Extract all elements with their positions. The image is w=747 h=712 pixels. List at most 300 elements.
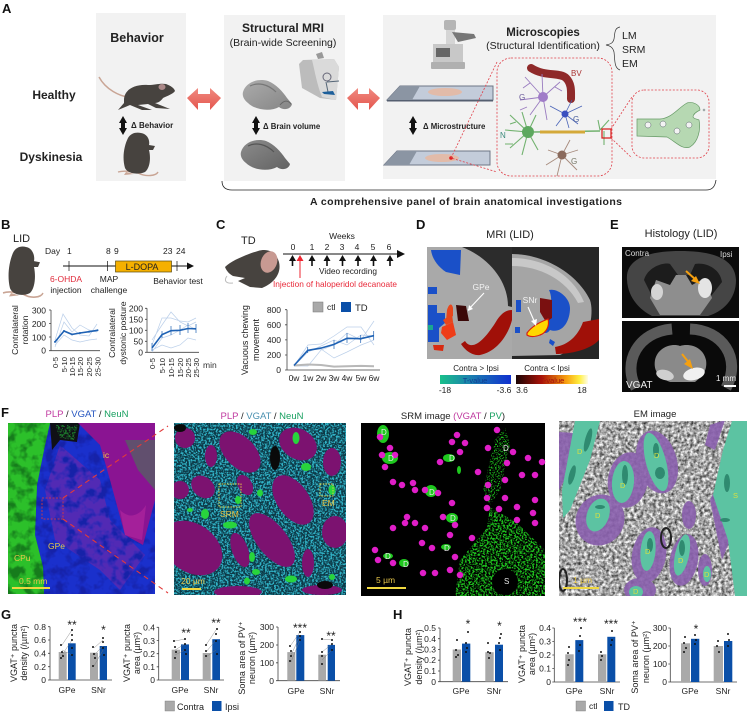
labels: dendrites: D xyxy=(654,451,660,460)
chart: VGAT puncta density: SNr xyxy=(91,685,106,695)
day labels: Day xyxy=(45,246,61,256)
row label: healthy: Healthy xyxy=(32,88,76,102)
image: EM xyxy=(559,420,747,602)
chart: contralateral rotation: 0 xyxy=(41,346,46,356)
chart: VGAT puncta area xyxy=(122,616,224,695)
chart: soma area of PV neuron: Soma area of PV⁺ xyxy=(237,621,247,695)
week numbers: 6 xyxy=(387,242,392,252)
chart: VGAT puncta density: * xyxy=(497,619,502,633)
chart: soma area of PV neuron: GPe xyxy=(681,686,699,696)
labels: dendrites: D xyxy=(633,587,639,596)
chart: contralateral rotation: 25-30 xyxy=(94,357,102,376)
image: GPe confocal xyxy=(174,423,346,595)
chart: contralateral rotation xyxy=(10,305,102,376)
label: injection: Injection of haloperidol decanoate xyxy=(273,279,397,289)
events xyxy=(50,274,203,295)
axis unit: min: min xyxy=(203,360,217,370)
heading: Histology (LID) xyxy=(645,228,717,240)
label and arrow: SNr: SNr xyxy=(523,295,537,305)
chart: vacuous chewing movement: 1w xyxy=(303,373,314,383)
chart: VGAT puncta area: *** xyxy=(604,617,618,631)
panel D: MRI xyxy=(416,217,599,395)
chart: VGAT puncta density: 0.4 xyxy=(34,648,46,658)
chart: contralateral rotation: 20-25 xyxy=(85,357,94,376)
legend: Contra xyxy=(177,702,204,712)
chart: contralateral dystonic posture: 25-30 xyxy=(192,358,201,377)
label: video recording: Video recording xyxy=(319,266,377,276)
labels: dendrites: D xyxy=(620,481,626,490)
labels: dendrites xyxy=(381,428,509,586)
chart: soma area of PV neuron: neuron (µm²) xyxy=(641,631,651,683)
panel: behavior xyxy=(96,13,186,181)
chart: soma area of PV neuron: 300 xyxy=(260,622,274,632)
chart: contralateral rotation: 300 xyxy=(32,306,46,316)
heading: LID: LID xyxy=(13,233,30,245)
labels: dendrites: D xyxy=(450,514,456,523)
highlighted synapse box xyxy=(602,129,611,138)
labels: cell types: N xyxy=(500,131,506,140)
day labels: 23 xyxy=(163,246,173,256)
heading: behavior: Behavior xyxy=(110,31,164,45)
chart: VGAT puncta area: 0.4 xyxy=(143,622,155,632)
chart: soma area of PV neuron: ** xyxy=(326,629,336,643)
labels: SRM EM xyxy=(181,498,335,586)
panel label E: E xyxy=(610,217,619,232)
legend: T-value colorbars: Contra < Ipsi xyxy=(524,364,570,373)
events: MAP xyxy=(100,274,119,284)
chart: VGAT puncta density: ** xyxy=(67,618,77,632)
image: SRM xyxy=(361,423,545,596)
legend xyxy=(165,701,239,712)
timeline xyxy=(273,231,405,289)
labels: contra and ipsi: Contra xyxy=(625,249,650,258)
legend: Ipsi xyxy=(225,702,239,712)
week numbers: 1 xyxy=(310,242,315,252)
chart: VGAT puncta area: *** xyxy=(573,615,587,629)
labels: dendrites: D xyxy=(503,444,509,453)
chart: contralateral dystonic posture: 0 xyxy=(138,348,143,358)
week numbers: 0 xyxy=(291,242,296,252)
chart: contralateral dystonic posture: 20-25 xyxy=(184,358,193,377)
chart: VGAT puncta density: 0.5 xyxy=(424,623,436,633)
legend: ctl xyxy=(327,302,336,312)
chart: soma area of PV neuron: 100 xyxy=(260,658,274,668)
labels: dendrites: S xyxy=(504,577,509,586)
chart: soma area of PV neuron: GPe xyxy=(287,686,305,696)
chart: VGAT puncta density: VGAT⁺ puncta xyxy=(9,624,19,682)
labels: dendrites: D xyxy=(388,454,394,463)
label: BV: BV xyxy=(571,69,582,78)
chart: VGAT puncta area: 0 xyxy=(546,677,551,687)
panel E: histology xyxy=(610,217,739,392)
labels: dendrites: D xyxy=(429,488,435,497)
chart: VGAT puncta area: area (µm²) xyxy=(132,632,142,674)
chart: VGAT puncta density: SNr xyxy=(487,686,501,696)
chart: contralateral dystonic posture: 150 xyxy=(129,314,143,324)
labels: dendrites: D xyxy=(595,511,601,520)
chart: soma area of PV neuron: 200 xyxy=(653,641,667,651)
heading: low magnification channels: PLP / VGAT / NeuN xyxy=(46,409,129,420)
callout: cell types xyxy=(497,58,612,176)
legend: T-value colorbars: Contra > Ipsi xyxy=(453,364,499,373)
chart: vacuous chewing movement: movement xyxy=(251,318,261,361)
legend: TD xyxy=(355,303,368,314)
labels: contra and ipsi: Ipsi xyxy=(720,250,733,259)
legend xyxy=(576,701,630,712)
labels: cell types: G xyxy=(573,115,579,124)
chart: VGAT puncta density: GPe xyxy=(58,685,76,695)
chart: contralateral rotation: 200 xyxy=(32,319,46,329)
chart: contralateral dystonic posture: 5-10 xyxy=(158,358,167,373)
label: VGAT: VGAT xyxy=(626,380,652,391)
callout: synaptic bouton xyxy=(632,90,709,158)
caption: comprehensive panel: A comprehensive panel of brain anatomical investigations xyxy=(310,196,622,208)
icon: microscope xyxy=(431,20,476,69)
chart: VGAT puncta area: 0.2 xyxy=(143,649,155,659)
glia: purple xyxy=(520,74,562,120)
icon: mouse head xyxy=(225,249,280,288)
label: weeks: Weeks xyxy=(329,231,355,241)
labels: SRM EM: EM xyxy=(322,498,335,508)
row label: dyskinesia: Dyskinesia xyxy=(20,150,83,164)
chart: VGAT puncta density: density (/µm²) xyxy=(19,625,29,681)
labels: ic GPe CPu: CPu xyxy=(14,553,31,563)
labels: dendrites: D xyxy=(704,570,710,579)
glia: blue xyxy=(550,100,582,128)
chart: VGAT puncta density: 0.3 xyxy=(424,644,436,654)
chart: VGAT puncta density: 0.1 xyxy=(424,666,436,676)
chart: vacuous chewing movement: 400 xyxy=(267,335,281,345)
day labels: 24 xyxy=(176,246,186,256)
chart: VGAT puncta density: VGAT⁺ puncta xyxy=(403,628,413,686)
chart: VGAT puncta area: ** xyxy=(211,616,221,630)
list: LM SRM EM: EM xyxy=(622,58,638,70)
events: challenge xyxy=(91,285,127,295)
chart: soma area of PV neuron: neuron (µm²) xyxy=(247,632,257,684)
chart: vacuous chewing movement: 2w xyxy=(316,373,327,383)
chart: VGAT puncta density: * xyxy=(101,623,106,637)
scale bar xyxy=(724,385,736,387)
chart: contralateral dystonic posture: Contralateral xyxy=(107,308,117,358)
callout lines: synapse zoom xyxy=(611,97,632,158)
chart: soma area of PV neuron: Soma area of PV⁺ xyxy=(630,620,640,694)
chart: soma area of PV neuron: SNr xyxy=(320,686,334,696)
labels: ic GPe CPu: GPe xyxy=(48,541,65,551)
timeline xyxy=(45,246,203,295)
chart: VGAT puncta area: 0.1 xyxy=(143,662,155,672)
labels: dendrites: D xyxy=(385,552,391,561)
panel H: TD quantification xyxy=(393,607,737,712)
heading: SRM image: SRM image (VGAT / PV) xyxy=(401,411,505,422)
labels: dendrites: D xyxy=(577,447,583,456)
blood vessel xyxy=(531,68,571,99)
chart: VGAT puncta density: 0.6 xyxy=(34,635,46,645)
label: delta behavior: Δ Behavior xyxy=(131,121,173,130)
label: L-DOPA: L-DOPA xyxy=(126,262,158,272)
chart: contralateral rotation: rotation xyxy=(20,315,30,344)
chart: VGAT puncta area: ** xyxy=(181,626,191,640)
icon: dyskinesia slide xyxy=(384,151,490,165)
chart: VGAT puncta area: 0.3 xyxy=(539,636,551,646)
label: scale bar: 5 µm xyxy=(376,575,395,585)
chart: VGAT puncta area: SNr xyxy=(600,686,614,696)
chart: contralateral dystonic posture: 0-5 xyxy=(148,358,157,369)
ROI boxes xyxy=(219,484,333,507)
bracket: comprehensive panel xyxy=(222,180,716,190)
red arrow: injection xyxy=(296,255,304,278)
panel: microscopies xyxy=(383,15,716,179)
subheading: structural identification: (Structural Identification) xyxy=(486,40,600,52)
chart: contralateral dystonic posture: 10-15 xyxy=(167,358,176,377)
scale bar xyxy=(182,588,201,590)
chart: soma area of PV neuron: 100 xyxy=(653,659,667,669)
heading: structural MRI: Structural MRI xyxy=(242,21,324,35)
week numbers: 2 xyxy=(325,242,330,252)
scale bar xyxy=(12,587,50,589)
events: Behavior test xyxy=(153,276,203,286)
chart: vacuous chewing movement: 6w xyxy=(369,373,380,383)
bracket: microscopy types xyxy=(606,27,620,70)
panel label B: B xyxy=(1,217,10,232)
zoom box xyxy=(42,498,63,519)
chart: contralateral rotation: 5-10 xyxy=(60,357,69,372)
chart: contralateral dystonic posture: 100 xyxy=(129,326,143,336)
chart: VGAT puncta area: 0.2 xyxy=(539,650,551,660)
list: LM SRM EM: SRM xyxy=(622,44,645,56)
labels: dendrites: D xyxy=(645,547,651,556)
histology image: top xyxy=(622,247,739,318)
chart: VGAT puncta density: 0.2 xyxy=(424,655,436,665)
L-DOPA bar xyxy=(116,261,172,272)
chart: contralateral dystonic posture: 15-20 xyxy=(176,358,185,377)
bouton shape xyxy=(637,102,700,148)
chart: VGAT puncta area: SNr xyxy=(204,685,218,695)
panel label A: A xyxy=(2,1,12,16)
chart: VGAT puncta area: 0 xyxy=(150,675,155,685)
chart: VGAT puncta density: 0.4 xyxy=(424,634,436,644)
scale bar xyxy=(563,587,599,589)
week numbers: 5 xyxy=(371,242,376,252)
panel label D: D xyxy=(416,217,425,232)
labels: cell types: G xyxy=(519,93,525,102)
labels: SRM EM: 20 µm xyxy=(181,576,205,586)
panel label C: C xyxy=(216,217,226,232)
legend: T-value colorbars: -3.6 xyxy=(497,385,512,395)
legend: T-value colorbars: T-value xyxy=(540,376,564,385)
chart: VGAT puncta area: VGAT⁺ puncta xyxy=(517,625,527,683)
labels: ic GPe CPu: 0.5 mm xyxy=(19,576,47,586)
chart: vacuous chewing movement: 600 xyxy=(267,320,281,330)
chart: contralateral rotation: 0-5 xyxy=(51,357,60,368)
arrow: delta microstructure xyxy=(409,116,417,135)
chart: VGAT puncta density: * xyxy=(466,617,471,631)
chart: VGAT puncta area: 0.1 xyxy=(539,664,551,674)
labels: ic GPe CPu: ic xyxy=(103,450,110,460)
heading: EM image: EM image xyxy=(634,409,676,420)
list: LM SRM EM xyxy=(622,30,645,70)
labels: dendrites: D xyxy=(678,556,684,565)
labels: cell types: G xyxy=(571,157,577,166)
icon: healthy brain xyxy=(243,80,292,110)
chart: soma area of PV neuron: 300 xyxy=(653,623,667,633)
panel label G: G xyxy=(1,607,11,622)
chart: VGAT puncta density: GPe xyxy=(452,686,470,696)
chart: VGAT puncta area xyxy=(517,615,620,696)
labels: dendrites: D xyxy=(444,544,450,553)
icon: dyskinesia brain xyxy=(241,140,290,170)
chart: VGAT puncta area: 0.3 xyxy=(143,636,155,646)
glia: brown xyxy=(546,140,578,176)
label: scale bar: 1 mm xyxy=(716,374,736,383)
panel G: LID quantification xyxy=(1,607,340,712)
histology image: VGAT xyxy=(622,321,739,392)
chart: vacuous chewing movement: 5w xyxy=(356,373,367,383)
panel label F: F xyxy=(1,405,9,420)
chart: contralateral dystonic posture: dystonic posture xyxy=(118,301,128,365)
chart: contralateral rotation: 15-20 xyxy=(76,357,85,376)
panel: structural MRI xyxy=(224,15,345,181)
chart: VGAT puncta density: 0 xyxy=(431,677,436,687)
arrow: delta brain volume xyxy=(252,116,260,135)
vesicles xyxy=(645,109,705,134)
purple presynaptic terminals xyxy=(559,420,730,602)
chart: soma area of PV neuron: 0 xyxy=(662,677,667,687)
chart: VGAT puncta area: GPe xyxy=(171,685,189,695)
heading: TD: TD xyxy=(241,235,256,247)
labels: cell types xyxy=(500,93,579,166)
arrow: behavior to MRI xyxy=(187,88,221,110)
chart: vacuous chewing movement: 4w xyxy=(342,373,353,383)
day labels: 8 xyxy=(106,246,111,256)
chart: VGAT puncta density: 0 xyxy=(41,675,46,685)
chart: vacuous chewing movement: Vacuous chewing xyxy=(240,305,250,375)
icon: healthy slide xyxy=(387,86,493,102)
MRI map: GPe slice xyxy=(427,247,512,359)
week numbers xyxy=(291,242,392,252)
labels: dendrites xyxy=(577,447,738,596)
labels: dendrites: D xyxy=(403,560,409,569)
chart: soma area of PV neuron: 0 xyxy=(269,676,274,686)
legend: T-value colorbars: 18 xyxy=(577,385,587,395)
label and arrow: SNr xyxy=(523,295,537,326)
icon: LID mouse xyxy=(3,247,43,297)
panel B: LID model xyxy=(1,217,217,377)
panel C: TD model xyxy=(216,217,405,383)
dark mitochondria xyxy=(567,428,730,556)
arrow xyxy=(686,271,700,284)
arrow: delta behavior xyxy=(119,116,127,135)
legend: T-value colorbars: -18 xyxy=(439,385,451,395)
chart: contralateral dystonic posture: 50 xyxy=(134,336,143,346)
labels: dendrites: D xyxy=(381,428,387,437)
heading: high magnification channels: PLP / VGAT / NeuN xyxy=(221,411,304,422)
labels: SRM EM: SRM xyxy=(220,509,239,519)
list: LM SRM EM: LM xyxy=(622,30,637,42)
labels: contra and ipsi xyxy=(625,249,733,259)
labels: dendrites: S xyxy=(733,491,738,500)
label: delta brain volume: Δ Brain volume xyxy=(263,122,321,131)
icon: dyskinesia mouse xyxy=(118,133,158,176)
events: 6-OHDA xyxy=(50,274,82,284)
chart: soma area of PV neuron: SNr xyxy=(716,686,730,696)
myelin rings xyxy=(559,528,671,591)
label: delta microstructure: Δ Microstructure xyxy=(423,122,486,131)
week numbers: 3 xyxy=(340,242,345,252)
week numbers: 4 xyxy=(355,242,360,252)
chart: VGAT puncta density: 0.2 xyxy=(34,662,46,672)
chart: soma area of PV neuron: * xyxy=(694,622,699,636)
chart: vacuous chewing movement xyxy=(240,305,380,383)
label and arrow: GPe: GPe xyxy=(472,282,490,292)
legend: T-value colorbars xyxy=(439,364,588,395)
legend: ctl xyxy=(589,701,598,711)
icon: MRI scanner xyxy=(299,52,339,100)
chart: contralateral rotation: Contralateral xyxy=(10,305,20,355)
panel F: multi-scale imaging xyxy=(1,405,747,602)
neuron xyxy=(505,112,609,155)
MRI map: SNr slice xyxy=(512,247,599,359)
heading: microscopies: Microscopies xyxy=(506,27,580,39)
legend: T-value colorbars: T-value xyxy=(463,376,487,385)
chart: contralateral rotation: 100 xyxy=(32,332,46,342)
chart: soma area of PV neuron xyxy=(237,621,340,696)
chart: vacuous chewing movement: 0w xyxy=(289,373,300,383)
events: injection xyxy=(50,285,82,295)
chart: VGAT puncta density: 0.8 xyxy=(34,622,46,632)
arrow xyxy=(682,354,693,369)
labels: ic GPe CPu xyxy=(14,450,110,586)
chart: contralateral dystonic posture xyxy=(107,301,217,377)
day labels: 9 xyxy=(114,246,119,256)
labels: dendrites: D xyxy=(449,454,455,463)
chart: vacuous chewing movement: 3w xyxy=(329,373,340,383)
arrow: MRI to microscopies xyxy=(347,88,380,110)
chart: vacuous chewing movement: 0 xyxy=(276,365,281,375)
callout lines: slide to neurons xyxy=(451,62,497,172)
chart: vacuous chewing movement: 200 xyxy=(267,350,281,360)
zoom lines xyxy=(63,426,168,593)
image: GPe overview xyxy=(8,423,155,594)
chart: contralateral rotation: 10-15 xyxy=(68,357,77,376)
panel A: study design overview xyxy=(2,1,716,208)
panel label H: H xyxy=(393,607,402,622)
chart: contralateral dystonic posture: 200 xyxy=(129,304,143,314)
chart: vacuous chewing movement: 800 xyxy=(267,305,281,315)
label: scale bar: 1 µm xyxy=(573,575,592,585)
chart: VGAT puncta density xyxy=(9,618,112,695)
label and arrow: GPe xyxy=(468,282,490,311)
chart: VGAT puncta area: 0.4 xyxy=(539,623,551,633)
legend: T-value colorbars: 3.6 xyxy=(516,385,528,395)
subheading: brain-wide screening: (Brain-wide Screening) xyxy=(230,37,336,49)
chart: soma area of PV neuron: 200 xyxy=(260,640,274,650)
chart: VGAT puncta area: area (µm²) xyxy=(527,633,537,675)
legend: TD xyxy=(618,702,630,712)
chart: soma area of PV neuron: *** xyxy=(293,621,307,635)
day labels: 1 xyxy=(67,246,72,256)
chart: VGAT puncta area: VGAT⁺ puncta xyxy=(122,624,132,682)
chart: VGAT puncta density: density (/µm²) xyxy=(414,629,424,685)
chart: VGAT puncta density xyxy=(403,617,508,696)
legend xyxy=(313,302,368,314)
teal dendrites xyxy=(562,421,747,598)
heading: MRI (LID) xyxy=(486,229,534,241)
scale bar xyxy=(367,587,406,589)
chart: soma area of PV neuron xyxy=(630,620,737,696)
icon: healthy mouse xyxy=(99,77,175,110)
chart: VGAT puncta area: GPe xyxy=(565,686,583,696)
black arrows: video recording xyxy=(289,255,394,266)
